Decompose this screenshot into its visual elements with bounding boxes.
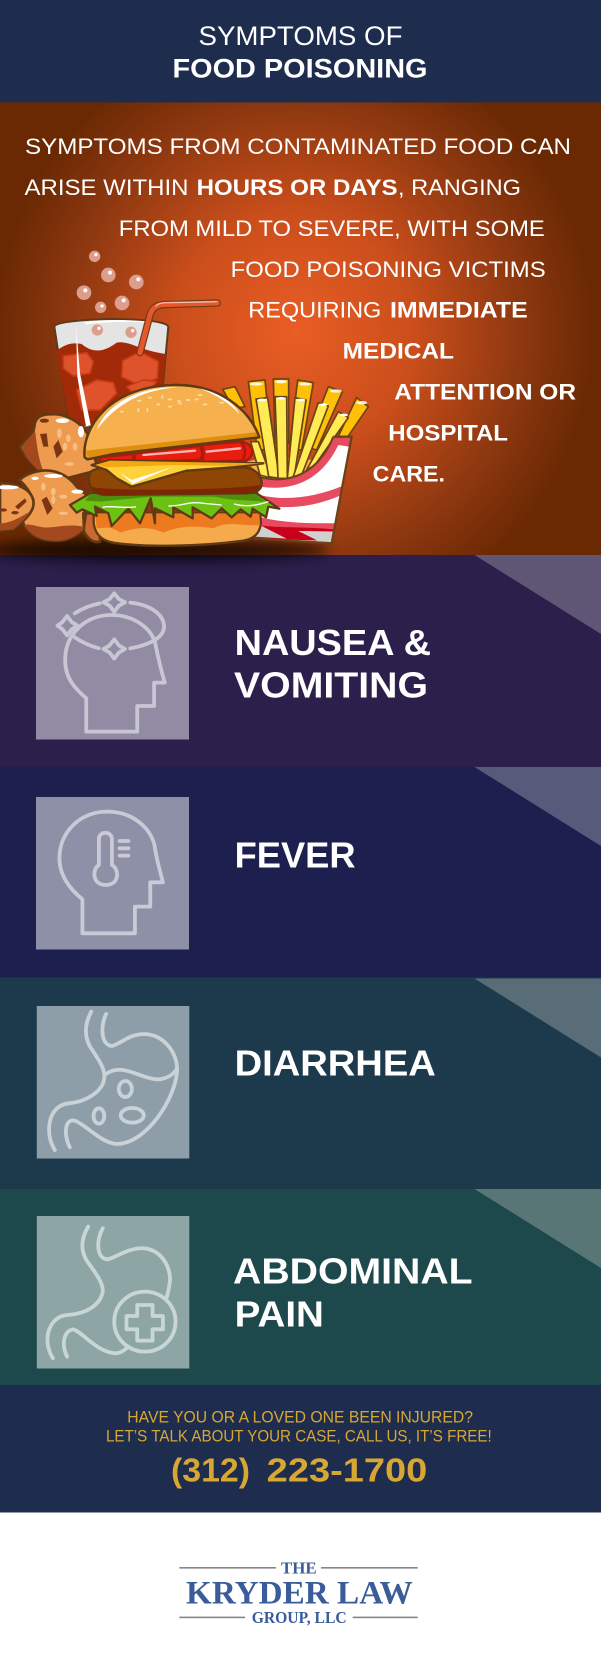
bubbles (77, 251, 144, 313)
logo: The Kryder Law Group: GROUP, LLC (252, 1608, 347, 1627)
hero paragraph: IMMEDIATE (390, 298, 528, 322)
illustration: fast food (0, 251, 368, 561)
hero paragraph (24, 134, 576, 487)
phone number: 223-1700 (267, 1453, 427, 1490)
bottom bun (94, 513, 261, 546)
title line one: SYMPTOMS OF (198, 21, 402, 51)
top bun (84, 385, 259, 459)
drink glass (54, 319, 168, 430)
tomato (100, 454, 133, 463)
icon: stomach with medical cross (37, 1216, 189, 1368)
panel: diarrhea (0, 978, 601, 1190)
french fries (223, 379, 368, 480)
symptom heading (233, 1251, 473, 1335)
call to action text: LET’S TALK ABOUT YOUR CASE, CALL US, IT’S FREE! (106, 1427, 492, 1446)
hero paragraph: ATTENTION OR (394, 379, 576, 404)
icon: dizzy head (36, 587, 189, 740)
hero paragraph: HOURS OR DAYS (197, 175, 398, 200)
fries box (253, 437, 352, 543)
icon: head with thermometer (36, 797, 189, 950)
panel: nausea and vomiting (0, 555, 601, 767)
panel: fever (0, 767, 601, 978)
hero paragraph: MEDICAL (343, 339, 454, 364)
hero paragraph: REQUIRING (248, 298, 381, 322)
cheese (92, 460, 263, 487)
hero paragraph: CARE. (373, 462, 445, 487)
hero paragraph: ARISE WITHIN (24, 175, 188, 200)
symptom heading: PAIN (235, 1294, 324, 1335)
hero paragraph: FOOD POISONING VICTIMS (231, 257, 546, 282)
panel: hero (0, 102, 601, 555)
phone number: (312) (171, 1453, 250, 1490)
symptom heading: ABDOMINAL (233, 1251, 473, 1292)
call to action text (106, 1407, 492, 1446)
hero paragraph: , RANGING (398, 175, 521, 200)
symptom heading: DIARRHEA (235, 1043, 436, 1084)
chicken nuggets (0, 414, 100, 542)
patty (89, 467, 262, 495)
symptom heading: VOMITING (234, 664, 428, 705)
symptom heading: FEVER (235, 835, 356, 876)
logo: The Kryder Law Group: KRYDER LAW (186, 1575, 413, 1611)
call to action text: HAVE YOU OR A LOVED ONE BEEN INJURED? (127, 1407, 473, 1426)
symptom heading: NAUSEA & (235, 622, 431, 663)
straw (140, 302, 217, 353)
lettuce (70, 493, 279, 526)
hero paragraph: FROM MILD TO SEVERE, WITH SOME (119, 216, 545, 241)
panel: abdominal pain (0, 1189, 601, 1385)
ground shadow (0, 539, 330, 561)
logo: The Kryder Law Group (0, 1512, 601, 1673)
burger (70, 385, 279, 546)
icon: stomach with spots (37, 1006, 189, 1158)
logo: The Kryder Law Group: THE (281, 1559, 317, 1578)
panel: header (0, 0, 601, 102)
title line two: FOOD POISONING (172, 53, 428, 83)
panel: call to action (0, 1385, 601, 1512)
phone number (171, 1453, 427, 1490)
symptom heading (234, 622, 431, 705)
hero paragraph: SYMPTOMS FROM CONTAMINATED FOOD CAN (25, 134, 571, 159)
hero paragraph: HOSPITAL (388, 421, 508, 446)
